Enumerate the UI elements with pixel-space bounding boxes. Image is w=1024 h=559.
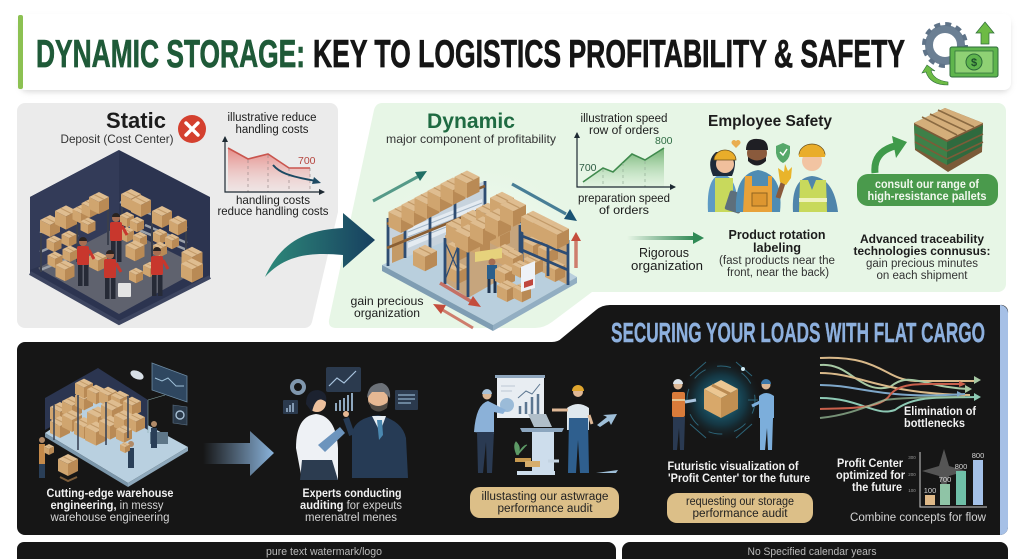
label: product rotation (719, 228, 835, 279)
label: experts auditing: merenatrel menes (305, 512, 397, 524)
label: rigorous organization: organization (631, 259, 703, 273)
panel: dynamic (329, 103, 1006, 331)
illustration: experts auditing (283, 367, 418, 480)
label: warehouse engineering: engineering, in messy (50, 500, 164, 512)
label: traceability: technologies connusus: (854, 244, 990, 258)
footer bar: watermark (17, 542, 616, 559)
subheading: deposit: Deposit (Cost Center) (60, 132, 174, 146)
chart: preparation speed rising: of orders (599, 203, 649, 217)
label: warehouse engineering: warehouse engineering (50, 512, 170, 524)
footer bar: watermark: pure text watermark/logo (266, 546, 382, 558)
label: profit center optimized: Profit Center (837, 458, 903, 470)
label: elimination of bottlenecks (904, 406, 976, 430)
heading: static: Static (106, 108, 166, 133)
label: warehouse engineering: Cutting-edge warehouse (46, 488, 174, 500)
label: elimination of bottlenecks: bottlenecks (904, 418, 965, 430)
label: gain precious organization: gain precious (350, 294, 424, 308)
chart: handling costs falling: 700 (298, 155, 316, 167)
label: profit center optimized (836, 458, 905, 494)
arrow: teal up (373, 171, 427, 201)
chart: profit center bars: 800 (955, 462, 967, 471)
heading: dynamic storage: DYNAMIC STORAGE: (36, 33, 305, 76)
label: gain precious organization (350, 294, 424, 320)
label: profit center optimized: the future (852, 482, 902, 494)
arrow: red up (571, 232, 581, 268)
button: storage audit (667, 493, 813, 523)
chart: handling costs falling (218, 112, 328, 218)
chart: preparation speed rising: illustration speed (580, 113, 668, 125)
label: product rotation: (fast products near the (719, 255, 835, 267)
button: storage audit: performance audit (692, 508, 788, 520)
footer bar: calendar years (622, 542, 1008, 559)
panel: static (17, 103, 338, 328)
chart: handling costs falling: handling costs (236, 193, 310, 207)
button: storage audit: requesting our storage (686, 496, 794, 508)
icon: red cross (178, 115, 206, 143)
label: elimination of bottlenecks: Elimination of (904, 406, 976, 418)
button: consult pallets: consult our range of (875, 179, 979, 191)
label: experts auditing (300, 488, 402, 524)
chart: preparation speed rising: preparation speed (578, 191, 670, 205)
icon: gear and money: $ (971, 57, 977, 69)
label: gain precious organization: organization (354, 306, 420, 320)
illustration: messy warehouse room (30, 150, 210, 323)
label: experts auditing: Experts conducting (302, 488, 402, 500)
label: rigorous organization: Rigorous (639, 246, 689, 260)
illustration: safety workers (708, 139, 838, 214)
label: traceability: on each shipment (876, 270, 968, 282)
chart: preparation speed rising (574, 113, 676, 217)
arrow: navy down (512, 184, 577, 221)
chart: bottleneck flow lines (820, 358, 975, 418)
label: rigorous organization (631, 246, 703, 273)
button: consult pallets (857, 174, 998, 206)
chart: profit center bars: 300 (908, 455, 916, 460)
label: futuristic visualization: Futuristic visualization of (668, 461, 799, 473)
subheading: profitability: major component of profitability (386, 132, 556, 146)
button: astwrage audit: performance audit (498, 503, 593, 515)
label: futuristic visualization: 'Profit Center' tor the future (668, 473, 810, 485)
illustration: warehouse engineering (39, 363, 188, 487)
illustration: futuristic profit center (672, 358, 774, 450)
chart: preparation speed rising: 800 (655, 135, 673, 147)
label: traceability: gain precious minutes (866, 258, 978, 270)
panel: securing your loads (17, 305, 1008, 535)
heading: dynamic: Dynamic (427, 109, 515, 133)
label: product rotation: Product rotation (728, 228, 826, 242)
chart: profit center bars (908, 449, 987, 507)
button: astwrage audit: illustasting our astwrage (482, 491, 608, 503)
label: profit center optimized: optimized for (836, 470, 905, 482)
arrow: gradient right (203, 431, 274, 476)
label: experts auditing: auditing for expeuts (300, 500, 402, 512)
arrow: static to dynamic (265, 213, 375, 277)
label: combine concepts: Combine concepts for flow (850, 512, 987, 524)
label: product rotation: labeling (753, 241, 801, 255)
label: futuristic visualization (668, 461, 810, 485)
arrowheads: flow outputs (957, 376, 981, 401)
chart: preparation speed rising: row of orders (589, 125, 659, 137)
chart: profit center bars: 100 (924, 486, 936, 495)
chart: profit center bars: 800 (972, 451, 984, 460)
label: product rotation: front, near the back) (727, 267, 829, 279)
chart: profit center bars: 100 (908, 488, 916, 493)
illustration: organized warehouse (382, 170, 577, 331)
chart: profit center bars: 700 (939, 475, 951, 484)
arrow: green curved (875, 136, 907, 173)
arrow: red lower right (440, 283, 481, 307)
footer bar: calendar years: No Specified calendar years (748, 546, 877, 558)
chart: handling costs falling: handling costs (236, 124, 309, 136)
button: consult pallets: high-resistance pallets (868, 191, 986, 203)
label: traceability: Advanced traceability (860, 232, 984, 246)
icon: gear and money (922, 22, 998, 85)
heading: employee safety: Employee Safety (708, 113, 832, 130)
title banner (18, 14, 1011, 92)
arrow: red lower left (433, 304, 473, 328)
chart: preparation speed rising: 700 (579, 162, 597, 174)
illustration: performance audit (474, 375, 618, 475)
chart: handling costs falling: reduce handling costs (218, 204, 328, 218)
arrow: rigorous organization (627, 232, 704, 244)
chart: profit center bars: 200 (908, 472, 916, 477)
button: astwrage audit (470, 487, 619, 518)
label: warehouse engineering (46, 488, 174, 524)
illustration: pallet stack (914, 108, 983, 172)
chart: handling costs falling: illustrative reduce (228, 112, 316, 124)
label: traceability (854, 232, 990, 282)
